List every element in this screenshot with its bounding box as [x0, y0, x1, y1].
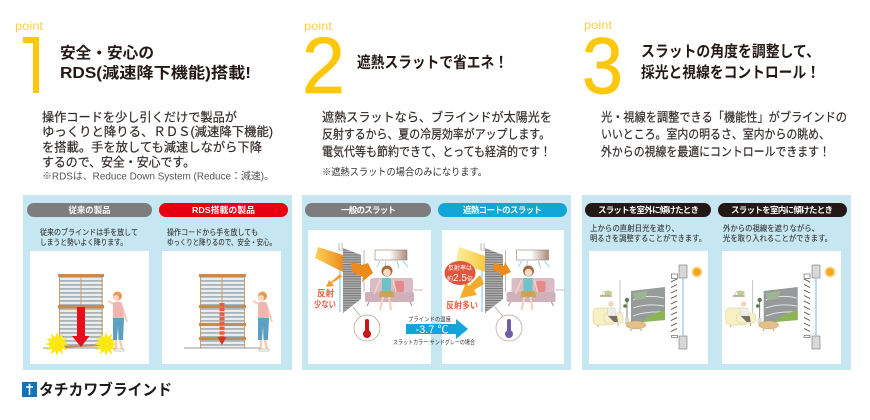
logo: タチカワブラインド	[22, 380, 172, 399]
pill: standard slat	[305, 203, 431, 217]
caption: RDS: 操作コードから手を放しても	[167, 227, 258, 237]
numeral 3: 3	[582, 21, 623, 110]
icon: purple thermometer	[496, 315, 522, 341]
caption: RDS: ゆっくりと降りるので、安全・安心。	[167, 237, 276, 247]
pill: conventional product	[27, 203, 152, 217]
point 2 body text: ※遮熱スラットの場合のみになります。	[322, 166, 487, 178]
point 1 body text: を搭載。手を放しても減速しながら下降	[42, 140, 262, 154]
label: less reflection: 反射	[317, 288, 334, 298]
caption: outward	[590, 223, 706, 243]
callout: reflectance 2.5x: 約2.5倍	[447, 273, 473, 284]
numeral 2: 2	[302, 21, 345, 110]
point 1 body text: ゆっくりと降りる、ＲＤＳ(減速降下機能)	[42, 124, 273, 139]
pill: RDS product: RDS搭載の製品	[192, 205, 255, 215]
point label 1: point	[15, 19, 44, 33]
icon: red thermometer	[354, 315, 380, 341]
numeral 1	[23, 37, 39, 93]
point 3 body text: 外からの視線を最適にコントロールできます！	[601, 144, 830, 159]
label: less reflection: 少ない	[314, 298, 336, 310]
caption: RDS	[167, 227, 276, 247]
point 3 heading block	[582, 18, 820, 110]
point 1 heading block: RDS(減速降下機能)搭載!	[60, 63, 251, 82]
point 1 body text: 操作コードを少し引くだけで製品が	[42, 110, 237, 124]
icon: sun	[824, 266, 836, 278]
caption: conventional: しまうと勢いよく降ります。	[40, 237, 127, 247]
point 1 body text: するので、安全・安心です。	[42, 156, 195, 170]
point 2 body text: 電気代等も節約できて、とっても経済的です！	[322, 144, 551, 159]
point 3 heading block: 採光と視線をコントロール！	[641, 62, 820, 82]
illustration: heat-shield slat room	[442, 230, 564, 364]
caption: outward: 明るさを調整することができます。	[590, 233, 706, 243]
pill: standard slat: 一般のスラット	[341, 205, 396, 215]
title 3: スラットの角度を調整して、	[641, 42, 820, 60]
point 1 heading block	[16, 22, 250, 93]
caption: conventional: 従来のブラインドは手を放して	[40, 227, 138, 237]
panel: RDS comparison	[23, 195, 292, 370]
label: more reflection: 反射多い	[446, 300, 478, 310]
panel: slat angle comparison	[582, 195, 851, 370]
panel: heat-shielding slat comparison	[302, 195, 571, 370]
caption: inward: 光を取り入れることができます。	[723, 233, 832, 243]
caption: inward: 外からの視線を遮りながら、	[723, 223, 819, 233]
caption: inward	[723, 223, 832, 243]
point 3 body text: 光・視線を調整できる「機能性」がブラインドの	[601, 110, 847, 124]
pill: tilted inward: スラットを室内に傾けたとき	[731, 205, 833, 215]
label: less reflection	[314, 288, 336, 310]
point 2 heading block	[302, 19, 508, 110]
point 2 body text: 遮熱スラットなら、ブラインドが太陽光を	[322, 110, 552, 124]
callout: reflectance 2.5x	[444, 261, 476, 285]
arrow: blind temperature -3.7°C: スラットカラー:サンドグレーの場合	[393, 338, 475, 346]
point 3 body text	[601, 110, 847, 159]
numeral 1: 1	[15, 21, 60, 110]
point 2 body text	[322, 110, 552, 178]
illustration: blind falling fast	[30, 251, 149, 364]
pill: tilted outward	[585, 203, 711, 217]
caption: conventional	[40, 227, 138, 247]
point 2 body text: 反射するから、夏の冷房効率がアップします。	[322, 126, 550, 142]
caption: outward: 上からの直射日光を遮り、	[590, 223, 679, 233]
illustration: slats tilted outward	[589, 251, 708, 364]
arrow: blind temperature -3.7°C: ブラインドの温度	[408, 316, 451, 324]
point label 2: point	[304, 19, 333, 33]
callout: reflectance 2.5x: 反射率は	[448, 264, 472, 272]
pill: heat-shield slat: 遮熱コートのスラット	[463, 205, 542, 215]
point label 3: point	[584, 18, 613, 32]
illustration: standard slat room	[308, 230, 431, 364]
point 3 body text: いいところ。室内の明るさ、室内からの眺め、	[601, 128, 830, 142]
title 2: 遮熱スラットで省エネ！	[357, 54, 508, 72]
arrow: blind temperature -3.7°C	[393, 316, 475, 346]
pill: heat-shield slat	[438, 203, 567, 217]
point 1 body text	[42, 110, 274, 182]
pill: tilted outward: スラットを室外に傾けたとき	[598, 205, 699, 215]
illustration: blind descending slowly	[162, 251, 281, 364]
pill: RDS product	[159, 203, 288, 217]
illustration: slats tilted inward	[722, 251, 841, 364]
pill: conventional product: 従来の製品	[68, 205, 110, 215]
point 1 body text: ※RDSは、Reduce Down System (Reduce：減速)。	[42, 170, 274, 182]
arrow: blind temperature -3.7°C: -3.7 ℃	[415, 324, 449, 336]
title 1: 安全・安心の	[60, 43, 154, 62]
icon: sun	[692, 266, 702, 278]
logo mark	[22, 382, 37, 397]
logo wordmark: タチカワブラインド	[39, 380, 172, 399]
pill: tilted inward	[718, 203, 847, 217]
